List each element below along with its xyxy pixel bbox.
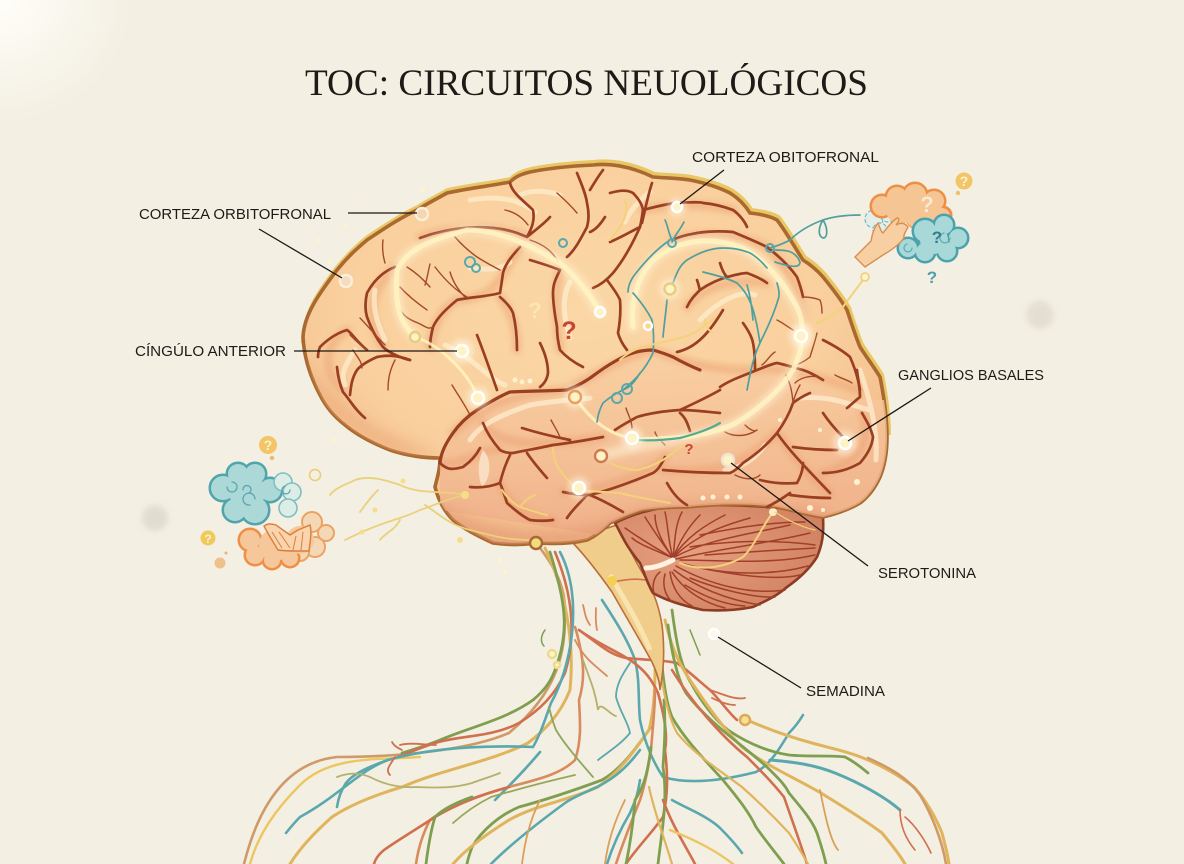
highlights on folds xyxy=(343,191,876,470)
sulci: frontal lobe xyxy=(420,173,588,257)
icon: clouds and hand upper right: ? xyxy=(920,192,934,217)
handshake xyxy=(264,524,311,551)
row of white dots xyxy=(316,188,860,574)
glow arcs xyxy=(396,230,600,337)
cerebellum xyxy=(615,505,823,610)
interior shading and lobes xyxy=(303,205,890,560)
label: corteza obitofronal: CORTEZA OBITOFRONAL xyxy=(692,149,879,166)
label: corteza obitofronal xyxy=(680,149,879,204)
teal cloud left xyxy=(210,463,301,524)
yellow fibres xyxy=(502,200,865,515)
orange cloud left xyxy=(239,512,334,569)
title: TOC: CIRCUITOS NEUOLÓGICOS xyxy=(305,62,868,104)
glowing circuits, teal and yellow fibres, nodes xyxy=(316,188,869,725)
icon: question marks in brain xyxy=(528,298,694,458)
nerves: branching nerve tree xyxy=(244,548,949,864)
outer yellow rim xyxy=(304,162,888,435)
label: corteza orbitofronal xyxy=(139,206,417,278)
label: ganglios basales xyxy=(848,367,1044,441)
label: ganglios basales: GANGLIOS BASALES xyxy=(898,367,1044,384)
cerebrum outline xyxy=(303,164,887,545)
nodes xyxy=(340,202,851,725)
icon: clouds and hand upper right: ? xyxy=(932,228,942,247)
node glows xyxy=(450,198,857,499)
question bubble top: ? xyxy=(264,437,272,453)
icon: clouds and hand upper right: ? xyxy=(927,268,937,287)
label: semadina: SEMADINA xyxy=(806,683,885,700)
question bubble: ? xyxy=(960,173,968,189)
question bubble small xyxy=(214,470,320,568)
icon: question marks in brain: ? xyxy=(561,317,577,345)
brainstem xyxy=(570,525,664,690)
glow halo xyxy=(396,230,803,456)
sulci: parietal and occipital xyxy=(590,170,652,242)
hand xyxy=(855,218,908,267)
icon: question marks in brain: ? xyxy=(528,298,542,323)
label: corteza orbitofronal: CORTEZA ORBITOFRONAL xyxy=(139,206,331,223)
label: cingulo anterior: CÍNGÚLO ANTERIOR xyxy=(135,343,286,360)
teal fibres xyxy=(623,240,779,390)
label: serotonina: SEROTONINA xyxy=(878,565,976,582)
light swirl cloud xyxy=(865,206,896,237)
icon: clouds and handshake lower left xyxy=(200,436,334,569)
orange cloud xyxy=(871,183,951,229)
icon: clouds and hand upper right xyxy=(855,172,972,287)
icon: question marks in brain: ? xyxy=(684,441,694,458)
brain xyxy=(303,162,890,560)
question bubble left: ? xyxy=(204,532,212,546)
label: serotonina xyxy=(731,463,976,582)
label: semadina xyxy=(718,637,885,700)
teal cloud xyxy=(898,215,968,262)
sulci: temporal lobe xyxy=(440,350,700,463)
